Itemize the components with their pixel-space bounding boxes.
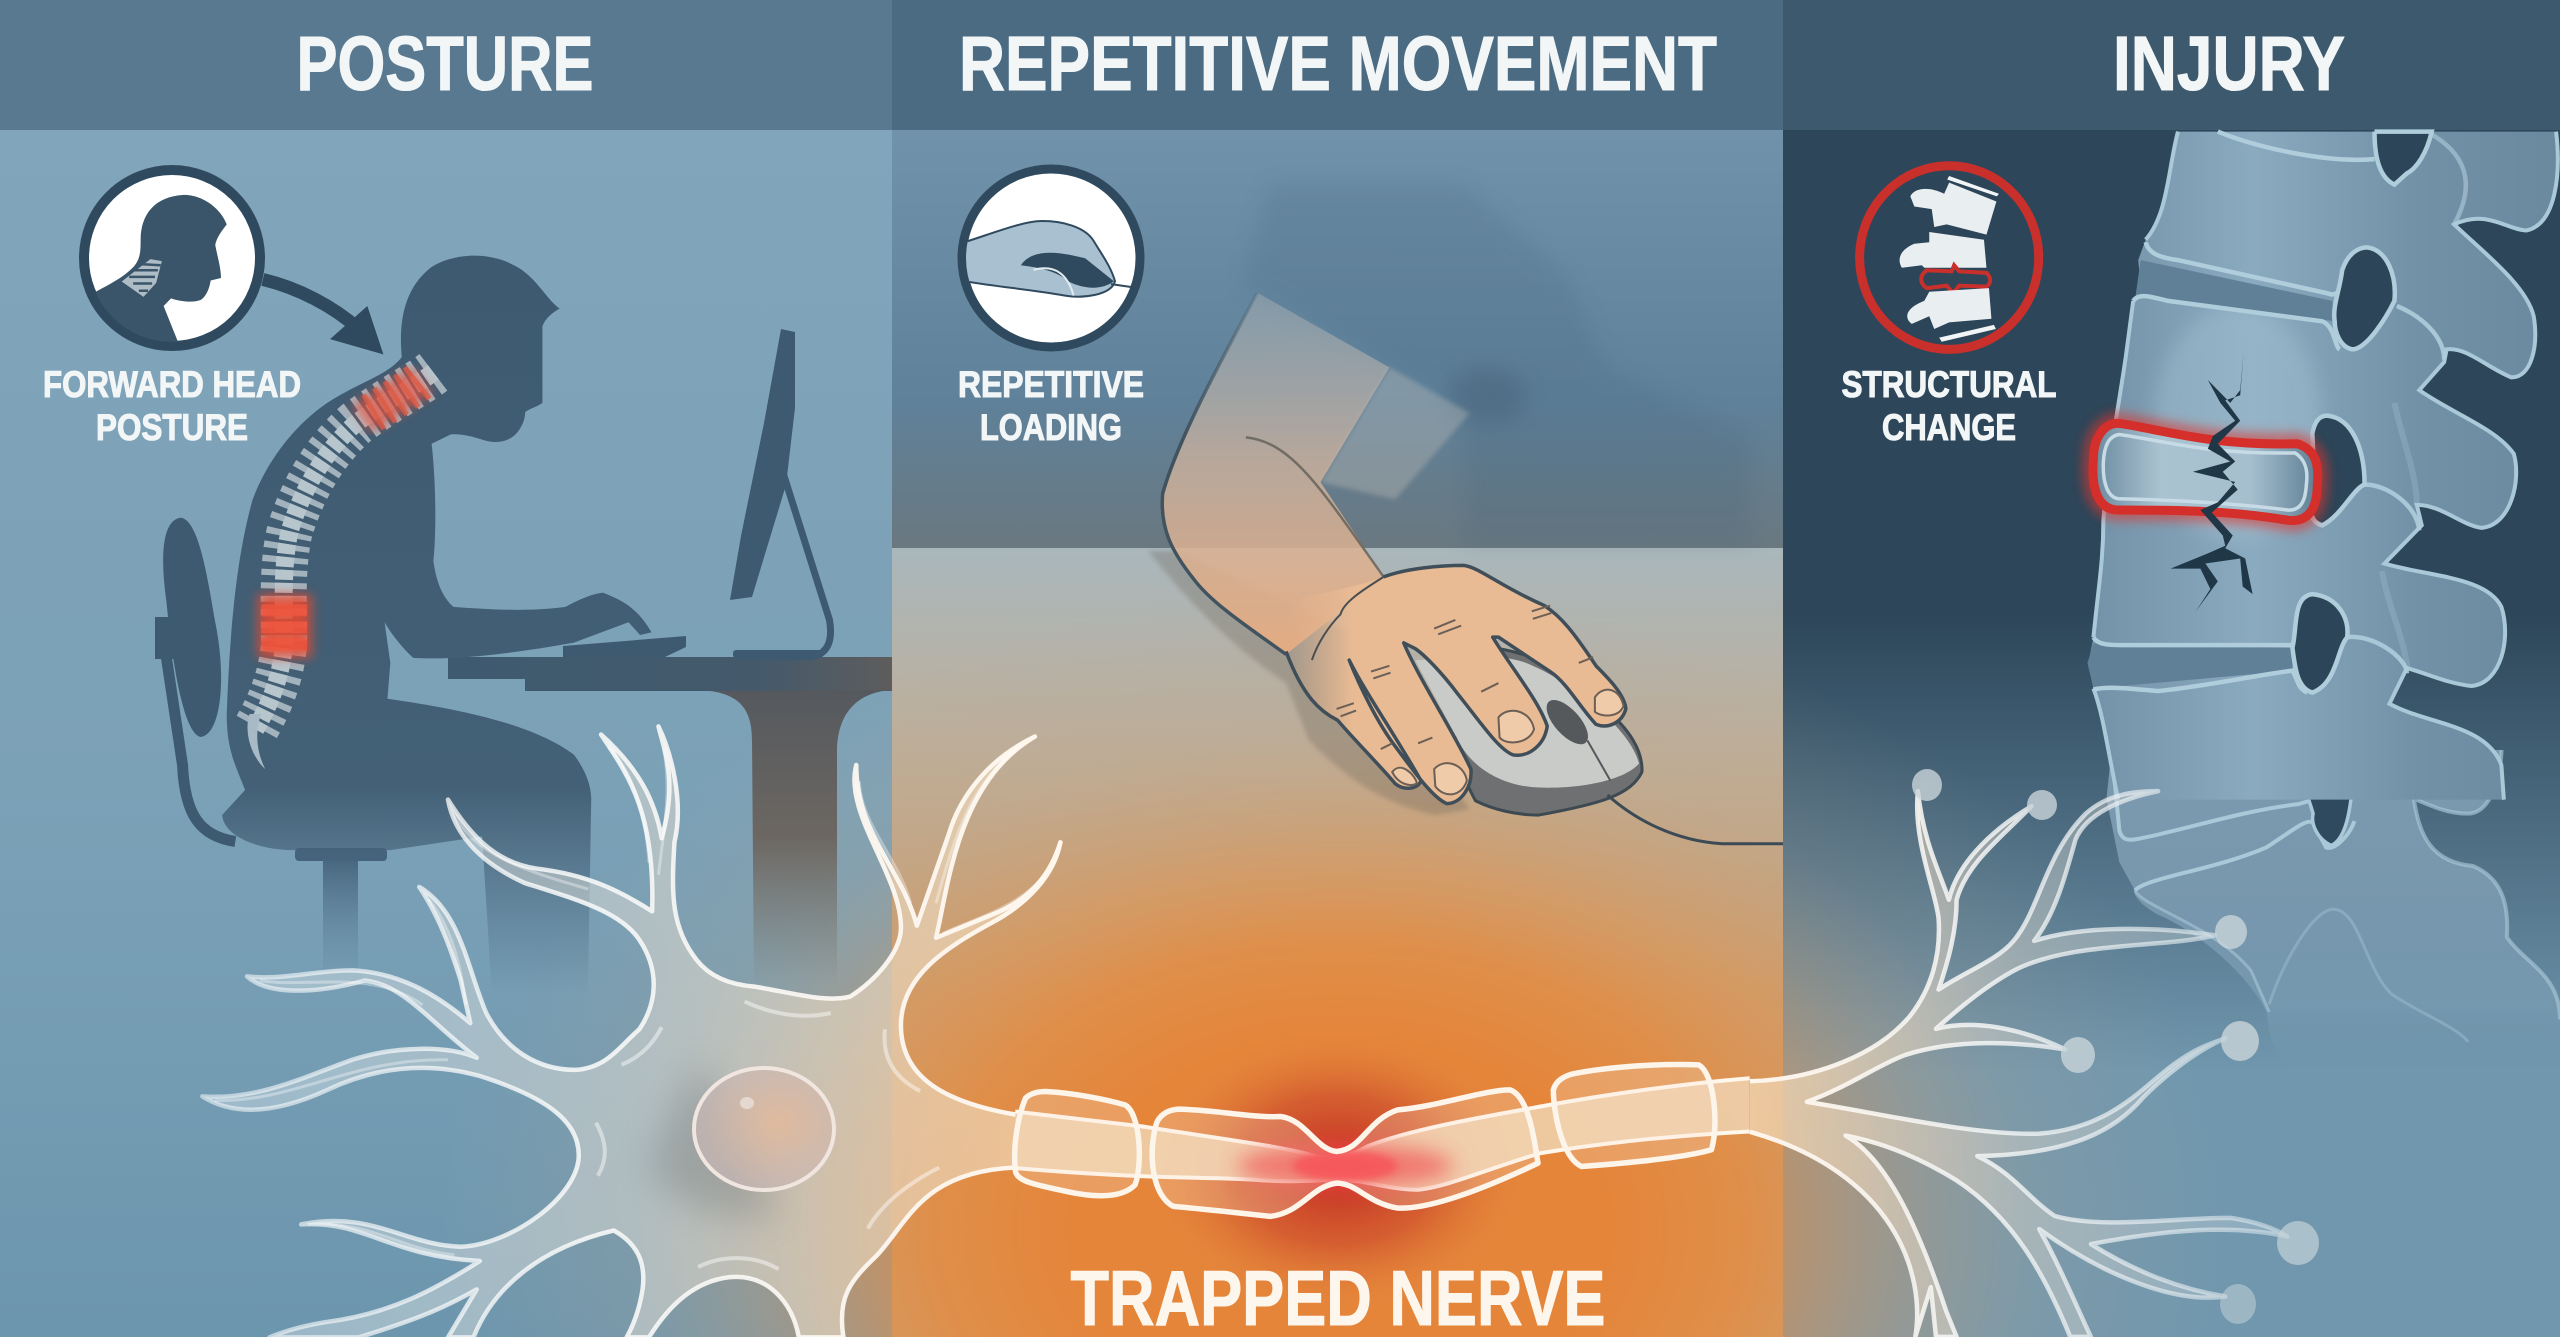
label: structural change: CHANGE — [1882, 407, 2016, 448]
heading: posture: POSTURE — [296, 21, 594, 107]
shaded area beside nucleus — [650, 1060, 780, 1218]
forearm — [1162, 293, 1389, 654]
header bar: posture — [0, 0, 892, 130]
dendrite highlights and cell-body folds — [215, 745, 1048, 1269]
panel: repetitive movement — [892, 0, 1790, 1337]
label: structural change: STRUCTURAL — [1842, 364, 2056, 405]
vertebrae left outline — [2093, 132, 2178, 800]
label: repetitive loading: REPETITIVE — [958, 364, 1144, 405]
nerve cell illustration — [202, 726, 2319, 1337]
bright center of injured vertebra — [2153, 306, 2322, 541]
nerve root openings — [2292, 132, 2432, 693]
dendrite terminal bulbs — [1912, 769, 2319, 1324]
red glow around injured disc — [2093, 423, 2318, 521]
neuron body and dendrites: left — [202, 726, 1060, 1337]
neuron terminal branches: right — [1750, 791, 2287, 1337]
chair — [155, 518, 387, 985]
spine with highlighted pain areas — [248, 372, 433, 769]
vertebrae right outline — [2384, 132, 2558, 800]
ghost motion arm — [1320, 367, 1470, 499]
hand outline — [1286, 565, 1626, 804]
label: repetitive loading: LOADING — [980, 407, 1122, 448]
intervertebral discs — [2136, 260, 2335, 321]
compression hot spot — [1237, 1144, 1453, 1188]
lumbar spine x-ray — [2087, 132, 2560, 1087]
injured disc — [2093, 423, 2318, 521]
hand fill — [1284, 565, 1626, 804]
finger nails and knuckles — [1312, 577, 1624, 794]
icon: forward head posture — [75, 170, 260, 367]
red inflammation halo — [1148, 1030, 1528, 1310]
vertebra edge lines — [2093, 132, 2466, 693]
lower vertebrae fading out — [2106, 750, 2560, 1087]
ghosted shirt sleeve — [1243, 184, 1751, 545]
desk — [448, 657, 892, 985]
icon: hand on mouse — [959, 169, 1140, 347]
heading: injury: INJURY — [2113, 21, 2345, 107]
header bar: injury — [1783, 0, 2560, 130]
header bar: repetitive movement — [892, 0, 1783, 130]
arm shadow on desk — [1148, 551, 1470, 815]
fracture crack — [2171, 352, 2253, 612]
vertebrae fill — [2088, 132, 2558, 800]
panel: injury — [1783, 0, 2560, 1337]
label: forward head posture: FORWARD HEAD — [43, 364, 301, 405]
person silhouette — [222, 256, 651, 994]
label: forward head posture: POSTURE — [96, 407, 248, 448]
arm and hand on mouse — [1148, 293, 1790, 844]
label: repetitive loading — [958, 364, 1144, 448]
computer monitor and keyboard — [563, 329, 831, 658]
computer mouse — [1415, 649, 1790, 844]
cell nucleus — [694, 1068, 834, 1190]
label: forward head posture — [43, 364, 301, 448]
myelin sheath segments — [1015, 1064, 1715, 1216]
axon — [1015, 1078, 1750, 1190]
label: structural change — [1842, 364, 2056, 448]
arrow: head to neck — [263, 279, 383, 354]
icon: damaged vertebrae — [1860, 166, 2039, 349]
heading: repetitive movement: REPETITIVE MOVEMENT — [959, 21, 1717, 107]
panel: posture — [0, 0, 892, 1337]
